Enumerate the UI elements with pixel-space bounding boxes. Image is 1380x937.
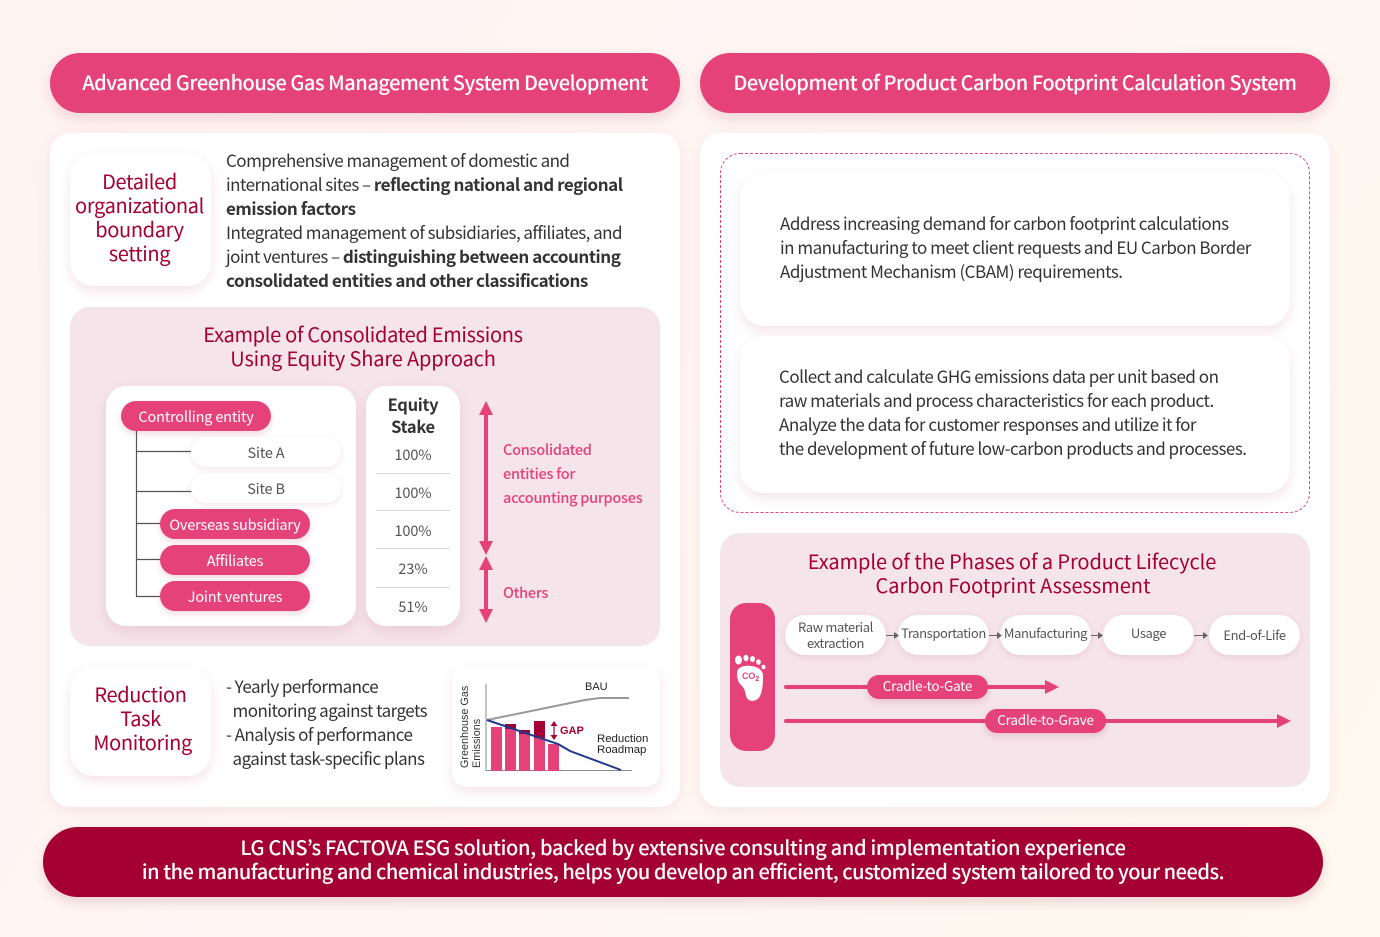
- label: consolidated entities: entities for: [503, 463, 575, 484]
- text: demand description: Address increasing demand for carbon footprint calculations: [780, 210, 1229, 235]
- banner: conclusion: in the manufacturing and chemical industries, helps you develop an efficient, customized system tailored to your needs.: [142, 856, 1224, 885]
- step: manufacturing: Manufacturing: [1004, 623, 1087, 642]
- step: raw material extraction: extraction: [807, 633, 864, 652]
- pill: controlling entity: Controlling entity: [138, 406, 254, 427]
- value: overseas subsidiary stake: 100%: [394, 520, 432, 541]
- text: monitoring bullets: - Yearly performance: [226, 673, 378, 698]
- heading: reduction task monitoring: Task: [120, 703, 161, 732]
- banner: conclusion: [43, 827, 1323, 897]
- pill: site A: [191, 437, 341, 467]
- card: demand text: [740, 173, 1290, 326]
- card: data collection text: [740, 336, 1290, 493]
- text: monitoring bullets: - Analysis of performance: [226, 721, 412, 746]
- text: data collection description: [779, 363, 1247, 460]
- icon: CO2 footprint: 2: [755, 676, 759, 683]
- pill: site B: Site B: [247, 478, 285, 499]
- panel: right system panel: [700, 133, 1330, 807]
- dashed box: requirements: [720, 153, 1310, 513]
- text: data collection description: Analyze the data for customer responses and utilize it for: [779, 411, 1196, 436]
- icon: CO2 footprint: [730, 603, 775, 751]
- label: others: Others: [503, 582, 548, 603]
- step: transportation: Transportation: [901, 623, 986, 642]
- text: data collection description: raw materials and process characteristics for each product.: [779, 387, 1214, 412]
- text: demand description: Adjustment Mechanism (CBAM) requirements.: [780, 258, 1123, 283]
- pill: site A: Site A: [248, 442, 284, 463]
- heading: lifecycle example: Carbon Footprint Assessment: [876, 570, 1150, 599]
- pill: affiliates: [160, 545, 310, 575]
- step: usage: [1103, 615, 1194, 655]
- text: monitoring bullets: monitoring against targets: [233, 697, 427, 722]
- pill: controlling entity: [121, 401, 271, 431]
- pill: overseas subsidiary: [160, 509, 310, 539]
- pill: site B: [191, 473, 341, 503]
- heading: consolidated emissions example: Using Equity Share Approach: [230, 343, 496, 372]
- heading: consolidated emissions example: Example of Consolidated Emissions: [203, 319, 523, 348]
- pill: cradle-to-grave: Cradle-to-Grave: [997, 709, 1094, 729]
- label: consolidated entities: [503, 439, 642, 508]
- header: product carbon footprint: [700, 53, 1330, 113]
- text: boundary description: international sites – reflecting national and regional: [226, 171, 623, 196]
- text: boundary description: Integrated management of subsidiaries, affiliates, and: [226, 219, 622, 244]
- chart: emissions vs roadmap: BAU: [585, 681, 608, 693]
- heading: lifecycle example: [808, 546, 1216, 599]
- banner: conclusion: LG CNS’s FACTOVA ESG solution, backed by extensive consulting and implementation experience: [240, 832, 1126, 861]
- value: site B stake: 100%: [394, 482, 432, 503]
- pill: joint ventures: [160, 581, 310, 611]
- value: joint ventures stake: 51%: [398, 596, 428, 617]
- text: data collection description: the development of future low-carbon products and processes.: [779, 435, 1247, 460]
- pill: cradle-to-gate: Cradle-to-Gate: [883, 675, 972, 695]
- heading: detailed organizational boundary setting: boundary: [95, 214, 184, 243]
- text: boundary description: consolidated entities and other classifications: [226, 267, 588, 292]
- heading: lifecycle example: Example of the Phases of a Product Lifecycle: [808, 546, 1216, 575]
- heading: reduction task monitoring: Reduction: [94, 679, 187, 708]
- card: equity stake table: [366, 386, 460, 626]
- pill: cradle-to-gate: [867, 675, 988, 699]
- pill: joint ventures: Joint ventures: [188, 586, 282, 607]
- chart: emissions vs roadmap: Emissions: [471, 718, 483, 768]
- step: raw material extraction: [785, 615, 886, 655]
- label: consolidated entities: accounting purposes: [503, 487, 642, 508]
- chart: emissions vs roadmap: GAP: [560, 725, 584, 737]
- text: monitoring bullets: [226, 673, 427, 770]
- pill: overseas subsidiary: Overseas subsidiary: [169, 514, 301, 535]
- icon: CO2 footprint: CO: [742, 671, 755, 681]
- heading: detailed organizational boundary setting: Detailed: [102, 166, 177, 195]
- text: data collection description: Collect and calculate GHG emissions data per unit based on: [779, 363, 1218, 388]
- value: affiliates stake: 23%: [398, 558, 428, 579]
- header: product carbon footprint: Development of Product Carbon Footprint Calculation System: [733, 67, 1297, 96]
- text: demand description: in manufacturing to meet client requests and EU Carbon Border: [780, 234, 1251, 259]
- chart: emissions vs roadmap: Roadmap: [597, 744, 646, 756]
- heading: consolidated emissions example: [203, 319, 523, 372]
- header: greenhouse gas management: [50, 53, 680, 113]
- text: boundary description: Comprehensive management of domestic and: [226, 147, 569, 172]
- heading: equity stake: Equity: [388, 392, 438, 416]
- card: entity tree: [106, 386, 356, 626]
- header: greenhouse gas management: Advanced Greenhouse Gas Management System Development: [82, 67, 648, 96]
- step: end-of-life: End-of-Life: [1223, 625, 1286, 644]
- pill: affiliates: Affiliates: [207, 550, 263, 571]
- heading: detailed organizational boundary setting: setting: [109, 238, 170, 267]
- panel: consolidated emissions example: [70, 307, 660, 646]
- label: consolidated entities: Consolidated: [503, 439, 592, 460]
- step: manufacturing: [1000, 615, 1091, 655]
- panel: left system panel: [50, 133, 680, 807]
- step: raw material extraction: Raw material: [798, 617, 873, 636]
- text: monitoring bullets: against task-specific plans: [233, 745, 424, 770]
- card: reduction task label: [70, 666, 211, 776]
- text: boundary description: [225, 147, 623, 292]
- heading: equity stake: Stake: [391, 414, 435, 438]
- step: usage: Usage: [1131, 623, 1166, 642]
- heading: reduction task monitoring: [93, 679, 192, 756]
- heading: reduction task monitoring: Monitoring: [93, 727, 192, 756]
- heading: equity stake: [388, 392, 438, 438]
- heading: detailed organizational boundary setting: organizational: [75, 190, 204, 219]
- text: boundary description: emission factors: [226, 195, 356, 220]
- panel: lifecycle example: [720, 533, 1310, 787]
- chart: emissions vs roadmap: Greenhouse Gas: [459, 685, 471, 768]
- step: transportation: [898, 615, 989, 655]
- card: organizational boundary label: [70, 153, 211, 286]
- step: end-of-life: [1209, 615, 1300, 655]
- text: demand description: [780, 210, 1252, 283]
- chart: emissions vs roadmap: Reduction: [597, 733, 648, 745]
- card: GAP chart: [452, 666, 660, 787]
- heading: detailed organizational boundary setting: [75, 166, 204, 267]
- pill: cradle-to-grave: [985, 709, 1106, 733]
- text: boundary description: joint ventures – distinguishing between accounting: [226, 243, 620, 268]
- value: site A stake: 100%: [394, 444, 432, 465]
